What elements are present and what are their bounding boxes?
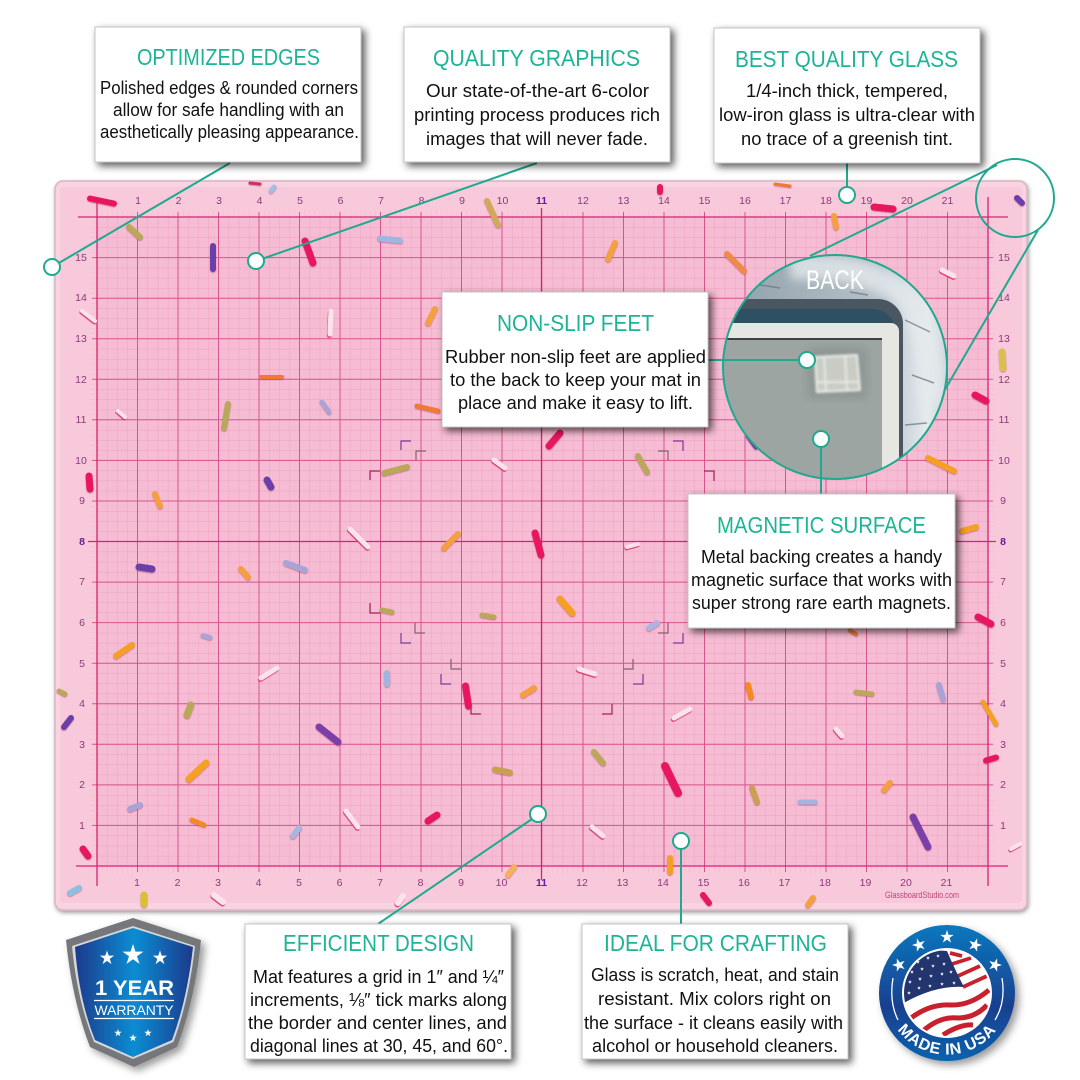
- ruler numbers bottom: 6: [337, 877, 343, 889]
- ruler numbers top: 6: [338, 195, 344, 207]
- ruler numbers left: 10: [75, 455, 87, 467]
- panel: best quality glass: low-iron glass is ultra-clear with: [719, 105, 975, 125]
- panel: efficient design: EFFICIENT DESIGN: [283, 930, 474, 956]
- connector: best quality glass: [839, 163, 855, 203]
- connector: quality graphics: [248, 163, 537, 269]
- ruler numbers right: 14: [998, 292, 1010, 304]
- connector: ideal for crafting: [673, 833, 689, 924]
- ruler numbers bottom: 9: [458, 877, 464, 889]
- flag: [900, 948, 992, 1035]
- ruler numbers left: 11: [76, 414, 87, 426]
- panel: best quality glass: [714, 28, 980, 163]
- panel: quality graphics: images that will never fade.: [426, 129, 648, 149]
- panel: best quality glass: 1/4-inch thick, tempered,: [746, 81, 948, 101]
- printed grid: [76, 197, 1008, 886]
- panel: magnetic surface: Metal backing creates a handy: [701, 547, 942, 567]
- ruler numbers left: [75, 252, 87, 832]
- ruler numbers bottom: 20: [900, 877, 912, 889]
- panel: efficient design: increments, ⅛″ tick marks along: [250, 990, 507, 1010]
- panel: ideal for crafting: the surface - it cleans easily with: [584, 1013, 843, 1033]
- ruler numbers bottom: 7: [377, 877, 383, 889]
- mat body: [55, 181, 1027, 910]
- ruler numbers top: 9: [459, 195, 465, 207]
- ruler numbers bottom: 15: [698, 877, 709, 889]
- ruler numbers left: 14: [75, 292, 87, 304]
- ruler numbers bottom: 17: [779, 877, 790, 889]
- rubber foot: [815, 355, 860, 392]
- label: back: BACK: [806, 265, 864, 295]
- ruler numbers bottom: 10: [496, 877, 507, 889]
- ruler numbers bottom: 21: [941, 877, 952, 889]
- ruler numbers left: 13: [75, 333, 87, 345]
- badge: 1 year warranty: WARRANTY: [94, 1003, 174, 1018]
- panel: ideal for crafting: [582, 924, 848, 1059]
- ruler numbers top: 5: [297, 195, 303, 207]
- ruler numbers bottom: 8: [418, 877, 424, 889]
- panel: non-slip feet: place and make it easy to lift.: [458, 393, 693, 413]
- ruler numbers top: 2: [176, 195, 182, 207]
- ruler numbers top: 1: [135, 195, 141, 207]
- ring stars: [891, 930, 1003, 972]
- panel: quality graphics: printing process produces rich: [414, 105, 660, 125]
- cutting mat: [55, 181, 1027, 910]
- connector: optimized edges: [44, 163, 230, 275]
- panel: ideal for crafting: IDEAL FOR CRAFTING: [604, 930, 827, 956]
- ruler numbers right: 8: [1000, 536, 1006, 548]
- ruler numbers top: 20: [901, 195, 913, 207]
- ruler numbers right: 11: [999, 414, 1010, 426]
- panel: optimized edges: OPTIMIZED EDGES: [137, 44, 320, 70]
- ruler numbers top: 12: [577, 195, 589, 207]
- ruler numbers left: 12: [75, 374, 87, 386]
- panel: magnetic surface: super strong rare earth magnets.: [692, 593, 951, 613]
- ruler numbers left: 4: [79, 698, 85, 710]
- ruler numbers right: 9: [1000, 495, 1006, 507]
- diagonal angle brackets: [370, 441, 714, 714]
- ruler numbers top: 3: [216, 195, 222, 207]
- ruler numbers left: 6: [79, 617, 85, 629]
- ruler numbers bottom: 16: [738, 877, 750, 889]
- ruler numbers right: 10: [998, 455, 1010, 467]
- panel: quality graphics: [404, 27, 670, 162]
- panel: ideal for crafting: resistant. Mix colors right on: [598, 989, 831, 1009]
- panel: efficient design: Mat features a grid in 1″ and ¼″: [253, 967, 505, 987]
- ruler numbers right: 2: [1000, 779, 1006, 791]
- panel: magnetic surface: MAGNETIC SURFACE: [717, 512, 926, 538]
- ruler numbers top: 21: [942, 195, 953, 207]
- ruler numbers bottom: 5: [296, 877, 302, 889]
- ruler numbers right: 4: [1000, 698, 1006, 710]
- ruler numbers left: 3: [79, 739, 85, 751]
- ruler numbers top: 11: [536, 195, 547, 207]
- ruler numbers top: 4: [257, 195, 263, 207]
- panel: best quality glass: BEST QUALITY GLASS: [735, 46, 958, 72]
- ruler numbers top: 8: [419, 195, 425, 207]
- ruler numbers bottom: 1: [134, 877, 140, 889]
- panel: optimized edges: allow for safe handling with an: [113, 100, 344, 120]
- ruler numbers bottom: 19: [860, 877, 871, 889]
- panel: non-slip feet: Rubber non-slip feet are applied: [445, 347, 706, 367]
- ruler numbers bottom: 12: [576, 877, 588, 889]
- ruler numbers top: 18: [820, 195, 832, 207]
- badge: 1 year warranty: [66, 918, 201, 1067]
- ruler numbers top: 13: [618, 195, 629, 207]
- ruler numbers right: 1: [1000, 820, 1006, 832]
- panel: non-slip feet: to the back to keep your mat in: [450, 370, 701, 390]
- ruler numbers left: 15: [75, 252, 87, 264]
- panel: best quality glass: no trace of a greenish tint.: [741, 129, 953, 149]
- panel: optimized edges: Polished edges & rounded corners: [100, 78, 358, 98]
- badge: 1 year warranty: 1 YEAR: [95, 977, 174, 1000]
- zoom connector lines: [810, 165, 1038, 393]
- ruler numbers bottom: 4: [256, 877, 262, 889]
- ruler numbers top: 10: [497, 195, 508, 207]
- zoom source circle on mat corner: [976, 159, 1054, 237]
- ruler numbers bottom: 13: [617, 877, 628, 889]
- ruler numbers right: 5: [1000, 658, 1006, 670]
- stars: [100, 944, 167, 1041]
- sprinkles: [59, 183, 1022, 905]
- ruler numbers bottom: 3: [215, 877, 221, 889]
- panel: quality graphics: Our state-of-the-art 6-color: [426, 81, 649, 101]
- ruler numbers top: 19: [861, 195, 872, 207]
- ruler numbers top: 17: [780, 195, 791, 207]
- panel: efficient design: diagonal lines at 30, 45, and 60°.: [250, 1036, 508, 1056]
- ruler numbers bottom: 11: [536, 877, 547, 889]
- panel: quality graphics: QUALITY GRAPHICS: [433, 45, 640, 71]
- panel: optimized edges: [95, 27, 361, 162]
- panel: non-slip feet: [442, 292, 708, 427]
- panel: ideal for crafting: Glass is scratch, heat, and stain: [591, 965, 839, 985]
- connector: efficient design: [378, 806, 546, 924]
- panel: optimized edges: aesthetically pleasing appearance.: [100, 122, 359, 142]
- ruler numbers right: 6: [1000, 617, 1006, 629]
- panel: ideal for crafting: alcohol or household cleaners.: [592, 1036, 838, 1056]
- ruler numbers left: 7: [79, 576, 85, 588]
- panel: non-slip feet: NON-SLIP FEET: [497, 310, 654, 336]
- ruler numbers left: 8: [79, 536, 85, 548]
- panel: magnetic surface: [688, 494, 955, 628]
- ruler numbers left: 9: [79, 495, 85, 507]
- ruler numbers bottom: 18: [819, 877, 831, 889]
- ruler numbers top: 14: [658, 195, 670, 207]
- ruler numbers top: 15: [699, 195, 710, 207]
- panel: efficient design: [245, 924, 511, 1059]
- ruler numbers top: 7: [378, 195, 384, 207]
- badge: made in USA: [878, 924, 1024, 1070]
- badge: made in USA: MADE IN USA: [898, 1023, 996, 1055]
- ruler numbers right: 7: [1000, 576, 1006, 588]
- ruler numbers bottom: 2: [175, 877, 181, 889]
- ruler numbers bottom: 14: [657, 877, 669, 889]
- ruler numbers right: 12: [998, 374, 1010, 386]
- website credit: GlassboardStudio.com: [885, 890, 959, 900]
- ruler numbers top: 16: [739, 195, 751, 207]
- connector: non-slip feet: [706, 352, 815, 368]
- ruler numbers right: 13: [998, 333, 1010, 345]
- connector: magnetic surface: [813, 431, 829, 495]
- ruler numbers bottom: [134, 877, 952, 889]
- panel: magnetic surface: magnetic surface that works with: [691, 570, 952, 590]
- ruler numbers left: 2: [79, 779, 85, 791]
- ruler numbers left: 5: [79, 658, 85, 670]
- ruler numbers left: 1: [79, 820, 85, 832]
- panel: efficient design: the border and center lines, and: [248, 1013, 507, 1033]
- ruler numbers right: [998, 252, 1010, 832]
- ruler numbers right: 3: [1000, 739, 1006, 751]
- photo: back of glass mat: [720, 250, 955, 485]
- ruler numbers right: 15: [998, 252, 1010, 264]
- ruler numbers top: [135, 195, 953, 207]
